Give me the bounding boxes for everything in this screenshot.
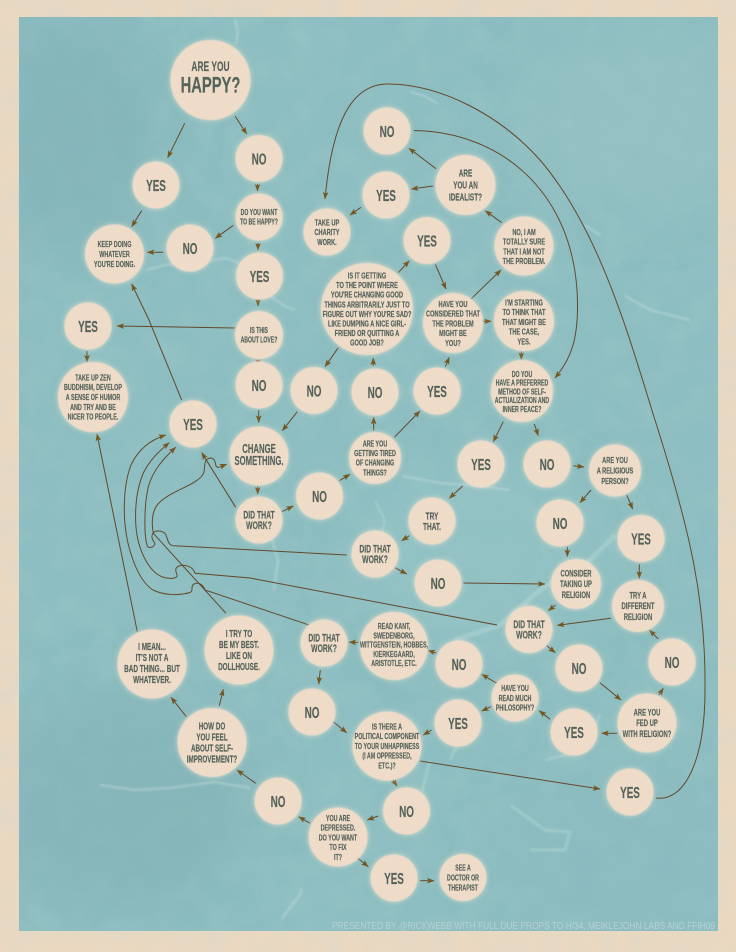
node: political component to your unhappiness: ETC.)? (378, 762, 396, 771)
node: yes (618, 515, 664, 562)
node: have you read much philosophy: HAVE YOU (501, 685, 529, 693)
node: preferred method of self-actualization: INNER PEACE? (503, 406, 541, 414)
arrow: different religion to did that work (557, 618, 611, 625)
node: no: NO (665, 653, 679, 671)
node: change something (230, 426, 288, 486)
node: no (288, 688, 336, 736)
node: no (364, 108, 410, 154)
arrow: did that work to no right (395, 568, 407, 574)
arrow: religious person to no (580, 490, 591, 503)
node: political component to your unhappiness: (I AM OPPRESSED, (362, 753, 412, 761)
node: yes: YES (631, 530, 651, 548)
arrow: arbitrary changes to no (325, 348, 338, 367)
node: did that work (300, 620, 348, 666)
arrow: about love to no (257, 360, 259, 366)
arrow: yes to keep doing from below (132, 284, 182, 400)
node: see a doctor or therapist: SEE A (455, 865, 471, 873)
arrow: do you want to yes (257, 243, 259, 250)
arrow: no to fed up (600, 683, 621, 700)
node: no: NO (252, 376, 266, 394)
node: no (536, 500, 584, 546)
node: have you considered the problem might be you: CONSIDERED THAT (426, 308, 480, 319)
arrow: political component to no (393, 780, 397, 786)
node: changing good things arbitrarily: THINGS ARBITRARILY JUST TO (324, 299, 410, 310)
node: no: NO (399, 802, 414, 820)
node: i mean not a bad thing: WHATEVER. (133, 673, 171, 685)
node: have you considered the problem might be you (423, 293, 483, 353)
node: preferred method of self-actualization (491, 360, 553, 422)
node: yes (64, 302, 112, 350)
node: political component to your unhappiness: TO YOUR UNHAPPINESS (355, 743, 420, 751)
node: yes: YES (78, 317, 98, 335)
node: starting to think: I'M STARTING (505, 297, 543, 308)
node: yes: YES (620, 783, 640, 801)
node: yes: YES (250, 267, 270, 285)
arrow: did that work to no lower right (547, 646, 555, 653)
arrow: did that work curving to yes middle (136, 443, 497, 625)
node: starting to think: THAT MIGHT BE (502, 317, 546, 327)
node: yes (414, 368, 460, 414)
node: did that work: DID THAT (243, 509, 275, 521)
node: totally sure not the problem: THAT I AM NOT (503, 246, 545, 257)
node: yes: YES (448, 714, 468, 732)
arrow: i try curving to change something (152, 458, 227, 613)
arrow: did that work to no (319, 670, 320, 684)
node: you are depressed (308, 808, 368, 866)
arrow: yes to different religion (638, 564, 640, 578)
node: consider taking up religion: RELIGION (562, 590, 591, 600)
node: see a doctor or therapist (440, 854, 486, 901)
node: are you an idealist: IDEALIST? (449, 191, 482, 203)
node: try a different religion: TRY A (629, 590, 647, 601)
node: no: NO (553, 514, 567, 532)
node: did that work: DID THAT (308, 632, 340, 644)
node: is this about love (235, 311, 283, 359)
node: how do you feel about self-improvement: YOU FEEL (196, 732, 228, 743)
node: you are depressed: IT? (334, 854, 342, 862)
node: yes (362, 172, 410, 218)
node: no: NO (312, 487, 327, 505)
arrow: yes to political component (423, 730, 432, 735)
arrow: self-improvement to i try (219, 689, 223, 706)
node: are you fed up with religion: FED UP (636, 718, 658, 729)
arrow: idealist to no (409, 148, 436, 169)
arrow: preferred method to yes (493, 422, 503, 442)
node: yes: YES (417, 232, 437, 250)
node: changing good things arbitrarily: GOOD JOB? (350, 337, 384, 348)
node: are you fed up with religion: WITH RELIGION? (623, 729, 672, 739)
node: getting tired of changing: OF CHANGING (356, 460, 394, 468)
node: changing good things arbitrarily: FRIEND OR QUITTING A (335, 328, 400, 338)
node: keep doing whatever: WHATEVER (99, 251, 130, 259)
node: take up charity work: WORK. (317, 237, 337, 247)
node: political component to your unhappiness (352, 712, 422, 780)
node: keep doing whatever: YOU'RE DOING. (94, 261, 135, 269)
node: did that work: WORK? (516, 629, 542, 641)
node: changing good things arbitrarily: YOU'RE CHANGING GOOD (331, 289, 403, 300)
node: starting to think: THE CASE, (509, 326, 539, 337)
node: you are depressed: DO YOU WANT (319, 834, 358, 843)
node: no (236, 362, 282, 408)
node: yes (458, 440, 504, 488)
node: did that work: WORK? (311, 642, 337, 654)
node: no (352, 368, 398, 416)
node: have you considered the problem might be you: MIGHT BE (439, 328, 467, 338)
node: yes: YES (384, 869, 404, 887)
node: is this about love: IS THIS (250, 327, 268, 335)
node: you are depressed: DEPRESSED. (321, 825, 355, 833)
node: keep doing whatever: KEEP DOING (98, 241, 131, 250)
arrow: yes to about love (257, 300, 259, 306)
node: getting tired of changing: THINGS? (363, 469, 387, 478)
node: take up charity work: TAKE UP (315, 217, 339, 228)
node: yes: YES (471, 455, 491, 473)
node: have you considered the problem might be you: THE PROBLEM (432, 318, 474, 329)
node: are you a religious person: A RELIGIOUS (597, 465, 633, 476)
node: try that: TRY (426, 510, 439, 522)
node: no (383, 788, 430, 834)
node: are you an idealist (436, 155, 496, 215)
arrow: no to you are depressed (367, 816, 378, 820)
node: yes (132, 162, 180, 208)
node: i try to be my best: I TRY TO (226, 627, 253, 639)
node: take up zen buddhism: A SENSE OF HUMOR (66, 394, 120, 402)
node: did that work: WORK? (246, 519, 272, 531)
node: no: NO (540, 455, 554, 473)
node: have you read much philosophy: PHILOSOPHY? (496, 705, 534, 713)
node: read kant and philosophers: WITTGENSTEIN, HOBBES, (360, 642, 428, 650)
node: political component to your unhappiness: POLITICAL COMPONENT (355, 733, 420, 742)
node: have you read much philosophy (492, 674, 538, 722)
arrow: you are depressed to yes (357, 857, 368, 867)
node: i try to be my best: DOLLHOUSE. (218, 660, 260, 672)
node: try a different religion: DIFFERENT (621, 601, 655, 612)
node: take up charity work (304, 208, 350, 256)
arrow: religious person to yes (627, 495, 633, 509)
node: totally sure not the problem: NO, I AM (512, 227, 536, 237)
arrow: no to change something (258, 410, 260, 422)
node: did that work: DID THAT (359, 543, 391, 555)
node: read kant and philosophers: READ KANT, (378, 623, 410, 631)
arrow: no to consider religion horizontal (463, 583, 545, 584)
node: read kant and philosophers: SWEDENBORG, (373, 632, 415, 641)
arrow: yes to try that (449, 486, 463, 498)
node: take up zen buddhism: BUDDHISM, DEVELOP (64, 384, 122, 393)
node: getting tired of changing: ARE YOU (363, 441, 387, 449)
node: you are depressed: YOU ARE (326, 815, 350, 823)
node: are you happy (170, 40, 250, 120)
node: starting to think (494, 291, 554, 351)
node: no (556, 644, 602, 692)
node: is this about love: ABOUT LOVE? (241, 337, 277, 345)
arrow: yes to have you considered (445, 357, 449, 367)
node: no (254, 778, 302, 824)
node: how do you feel about self-improvement: ABOUT SELF- (191, 743, 233, 754)
node: preferred method of self-actualization: METHOD OF SELF- (498, 388, 546, 397)
arrow: yes to zen buddhism (86, 351, 88, 362)
node: take up zen buddhism: NICER TO PEOPLE. (68, 414, 118, 422)
arrow: no to do you want (256, 184, 258, 191)
node: i mean not a bad thing: I MEAN... (138, 640, 166, 652)
arrow: consider religion to did that work (548, 605, 556, 611)
node: political component to your unhappiness: IS THERE A (372, 724, 402, 732)
arrow: read kant to did that work (349, 641, 358, 643)
arrow: read philosophy to yes (482, 707, 491, 711)
node: are you happy: HAPPY? (181, 72, 240, 97)
node: did that work (506, 606, 552, 653)
node: no (290, 367, 338, 414)
node: are you fed up with religion (618, 694, 676, 752)
arrow: arbitrary changes to yes (398, 261, 409, 273)
arrow: are you happy to yes (168, 123, 185, 158)
node: you are depressed: TO FIX (329, 844, 347, 852)
arrow: yes to charity work (350, 207, 361, 215)
node: starting to think: YES. (518, 336, 530, 347)
node: did that work (352, 530, 398, 578)
arrow: have you considered to totally sure (471, 270, 501, 299)
arrow: no to getting tired (339, 474, 350, 481)
node: preferred method of self-actualization: ACTUALIZATION AND (495, 397, 549, 405)
arrow: yes to read philosophy (539, 711, 550, 719)
node: how do you feel about self-improvement (178, 708, 246, 777)
arrow: no curving to preferred method (414, 130, 578, 378)
node: no: NO (431, 574, 445, 592)
node: totally sure not the problem (494, 216, 554, 276)
node: did that work (236, 496, 282, 544)
node: no (414, 560, 462, 606)
node: i try to be my best (204, 616, 274, 684)
node: totally sure not the problem: TOTALLY SURE (503, 236, 545, 247)
node: read kant and philosophers: KIERKEGAARD, (373, 651, 415, 659)
arrow: yes to see a doctor (420, 880, 434, 882)
arrow: starting to think to preferred method (520, 352, 522, 360)
node: changing good things arbitrarily: TO THE POINT WHERE (336, 280, 398, 290)
node: no (236, 135, 282, 182)
node: try a different religion: RELIGION (624, 612, 653, 622)
node: are you an idealist: YOU AN (453, 179, 478, 191)
node: changing good things arbitrarily: IS IT GETTING (348, 270, 386, 281)
arrow: no to consider religion (566, 547, 568, 556)
node: yes (434, 700, 482, 746)
arrow: getting tired to yes (394, 411, 420, 437)
node: no: NO (380, 122, 394, 140)
arrow: change something to did that work (257, 486, 259, 494)
node: are you an idealist: ARE (459, 167, 473, 179)
arrow: yes to keep doing (132, 211, 142, 227)
arrow: no to political component (333, 722, 347, 733)
node: preferred method of self-actualization: HAVE A PREFERRED (496, 380, 548, 388)
arrow: no to religious person (573, 466, 584, 467)
node: no: NO (572, 659, 586, 677)
arrow: have you considered to starting to think (483, 320, 491, 322)
node: yes: YES (376, 186, 396, 204)
node: are you fed up with religion: ARE YOU (634, 707, 661, 718)
node: i try to be my best: BE MY BEST. (219, 638, 259, 650)
node: try that (408, 498, 456, 544)
node: how do you feel about self-improvement: HOW DO (199, 721, 226, 732)
node: yes (606, 768, 654, 816)
node: yes (236, 252, 283, 300)
arrow: preferred method to no (534, 424, 538, 436)
node: no (436, 640, 482, 688)
node: yes (404, 217, 450, 264)
arrow: self-improvement to i mean (171, 697, 186, 717)
node: are you a religious person: PERSON? (601, 476, 629, 486)
node: do you want to be happy (236, 194, 282, 240)
arrow: are you happy to no (235, 116, 247, 134)
node: getting tired of changing (349, 432, 401, 484)
arrow: read philosophy to no (482, 674, 497, 683)
node: keep doing whatever (85, 224, 144, 284)
node: take up zen buddhism: TAKE UP ZEN (75, 375, 111, 383)
node: have you considered the problem might be you: HAVE YOU (438, 299, 468, 309)
node: starting to think: TO THINK THAT (503, 307, 546, 318)
arrow: no to keep doing (147, 251, 163, 253)
arrow: about love to yes (117, 326, 235, 328)
arrow: try that to did that work (402, 536, 409, 541)
node: changing good things arbitrarily: FIGURE OUT WHY YOU'RE SAD? (323, 309, 412, 319)
node: see a doctor or therapist: THERAPIST (448, 885, 478, 893)
arrow: fed up to yes (602, 732, 617, 734)
node: no (648, 638, 696, 686)
arrow: did that work curving to yes inner (145, 447, 347, 555)
node: no: NO (183, 239, 197, 257)
arrow: no to read kant (428, 650, 436, 653)
arrow: no to self-improvement (237, 770, 256, 783)
node: are you a religious person (589, 444, 641, 496)
node: totally sure not the problem: THE PROBLEM. (503, 256, 545, 266)
node: no (524, 440, 570, 488)
node: change something: CHANGE (242, 443, 276, 457)
arrow: getting tired to no (373, 417, 375, 431)
node: no: NO (452, 655, 466, 673)
arrow: totally sure to idealist (485, 211, 502, 223)
arrow: yes to have you considered top (435, 264, 446, 289)
node: do you want to be happy: TO BE HAPPY? (240, 219, 278, 227)
node: have you considered the problem might be you: YOU? (445, 338, 461, 348)
node: yes: YES (564, 723, 584, 741)
node: did that work: WORK? (362, 553, 388, 565)
node: are you a religious person: ARE YOU (602, 455, 628, 465)
node: i try to be my best: LIKE ON (226, 649, 252, 661)
node: have you read much philosophy: READ MUCH (499, 695, 531, 703)
node: take up zen buddhism (58, 362, 128, 432)
arrow: do you want to no (215, 225, 233, 238)
arrow: no to arbitrary changes (372, 358, 374, 366)
node: no: NO (252, 150, 266, 168)
node: are you happy: ARE YOU (191, 60, 230, 75)
node: yes: YES (146, 176, 166, 194)
node: do you want to be happy: DO YOU WANT (241, 209, 277, 217)
node: yes (370, 854, 418, 902)
node: see a doctor or therapist: DOCTOR OR (447, 875, 479, 883)
arrow: did that work curving to yes outer (124, 435, 309, 625)
node: changing good things arbitrarily (321, 263, 413, 355)
node: how do you feel about self-improvement: IMPROVEMENT? (187, 754, 237, 765)
node: consider taking up religion (551, 559, 601, 609)
node: preferred method of self-actualization: DO YOU (512, 371, 532, 379)
node: yes (170, 400, 216, 448)
arrow: did that work to yes (202, 453, 236, 507)
node: no (296, 472, 343, 520)
node: i mean not a bad thing (118, 630, 186, 698)
node: read kant and philosophers: ARISTOTLE, ETC. (371, 660, 417, 669)
node: consider taking up religion: TAKING UP (560, 579, 592, 590)
arrow: no to change something diagonal (282, 412, 297, 431)
node: take up zen buddhism: AND TRY AND BE (70, 404, 116, 412)
arrow: you are depressed to no (299, 817, 310, 823)
arrow: idealist to yes (411, 186, 433, 189)
node: no: NO (307, 382, 321, 400)
node: change something: SOMETHING. (235, 455, 284, 469)
node: i mean not a bad thing: BAD THING... BUT (124, 662, 181, 674)
node: take up charity work: CHARITY (314, 227, 340, 238)
arrow: i mean to zen buddhism (97, 434, 137, 632)
node: try that: THAT. (423, 520, 441, 532)
node: yes: YES (183, 415, 203, 433)
node: no: NO (271, 792, 285, 810)
arrow: did that work to no (282, 506, 293, 512)
node: did that work: DID THAT (513, 618, 545, 630)
node: try a different religion (612, 580, 664, 632)
node: no (166, 224, 214, 272)
arrow: political component to yes (420, 761, 600, 789)
node: no: NO (368, 383, 382, 401)
node: consider taking up religion: CONSIDER (560, 568, 592, 579)
node: no: NO (305, 703, 319, 721)
arrow: no to different religion (649, 630, 658, 639)
arrow: yes long curve to charity work (325, 84, 705, 798)
node: read kant and philosophers (360, 612, 428, 680)
node: yes: YES (427, 382, 447, 400)
node: yes (550, 708, 598, 756)
node: changing good things arbitrarily: LIKE DUMPING A NICE GIRL- (328, 318, 406, 329)
arrow: fed up to no (659, 688, 663, 695)
node: i mean not a bad thing: IT'S NOT A (136, 651, 168, 663)
node: getting tired of changing: GETTING TIRED (354, 450, 396, 458)
